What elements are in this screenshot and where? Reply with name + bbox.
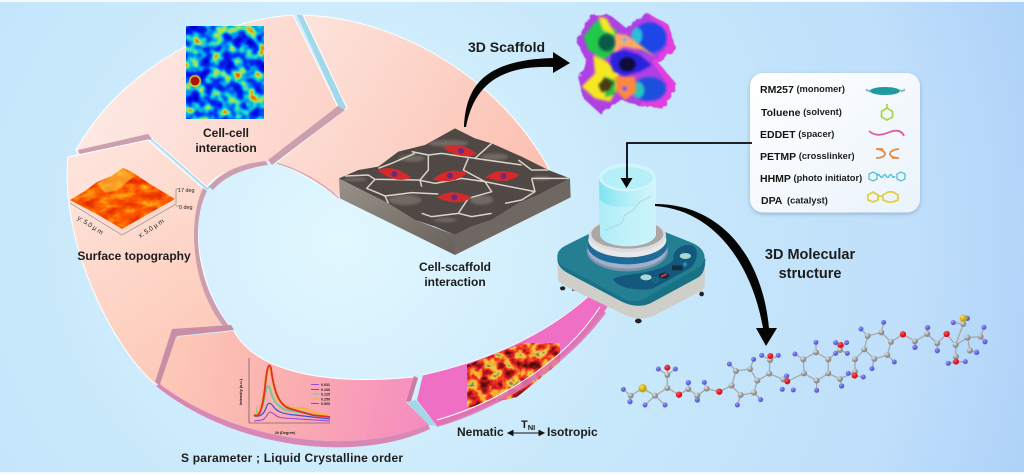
segment edge strips — [78, 106, 345, 190]
text: surface topography: Surface topography — [77, 249, 191, 263]
T NI: T — [521, 419, 528, 431]
arrow: legend to beaker — [620, 143, 752, 188]
isotropic: Isotropic — [547, 425, 598, 439]
arrow: to 3D scaffold — [464, 52, 570, 127]
icon: catalyst — [868, 192, 898, 202]
band thickness — [156, 384, 430, 447]
chevron strip — [155, 325, 234, 386]
curve 1 — [254, 412, 330, 421]
x axis label: 2θ (Degree) — [275, 431, 296, 435]
legend labels: PETMP — [760, 151, 796, 163]
upper-left hole — [598, 34, 615, 51]
illustration: magnetic stirrer with beaker — [557, 163, 705, 323]
text: cell-scaffold interaction — [419, 260, 491, 289]
orange ridges — [613, 33, 655, 100]
curve 2 — [254, 403, 330, 419]
pore shading — [343, 140, 551, 222]
illustration: 3D printed scaffold — [577, 13, 677, 113]
text: cell-scaffold interaction: Cell-scaffold — [419, 260, 491, 274]
text: nematic isotropic transition — [457, 419, 598, 439]
legend labels — [760, 84, 862, 207]
text: 3D molecular structure — [765, 247, 855, 282]
panel: cell-scaffold segment — [277, 15, 552, 200]
blue lobes — [631, 22, 667, 101]
inner edge strip — [194, 188, 230, 327]
knobs — [640, 253, 691, 280]
left side — [339, 178, 455, 255]
magenta rim — [637, 13, 677, 108]
text: S parameter: S parameter ; Liquid Crystalline order — [181, 451, 403, 465]
scale top: 17 deg — [178, 188, 194, 194]
inner white edge — [234, 331, 414, 379]
text: 3D molecular structure: 3D Molecular — [765, 247, 855, 263]
arrow: beaker to molecule — [655, 204, 777, 346]
top surface — [339, 128, 570, 235]
legend labels: DPA — [761, 195, 783, 207]
curve 4 — [254, 368, 330, 416]
outer shape — [577, 13, 677, 113]
plate rings — [587, 219, 668, 271]
legend labels: (spacer) — [798, 129, 834, 139]
segment gaps — [148, 15, 437, 426]
legend: 0.250 — [321, 398, 330, 402]
right side — [455, 178, 571, 255]
carbon atoms — [628, 321, 984, 399]
icon: crosslinker — [876, 149, 899, 158]
legend labels: RM257 — [760, 84, 794, 96]
base side — [557, 257, 705, 319]
double arrow — [508, 430, 544, 436]
panel: legend — [750, 73, 920, 212]
chart: surface topography — [70, 168, 194, 240]
T NI: NI — [528, 423, 535, 432]
legend labels: (monomer) — [796, 84, 845, 94]
scale bottom: 0 deg — [179, 205, 192, 211]
icon: toluene — [882, 104, 892, 120]
nematic: Nematic — [457, 425, 504, 439]
legend: 0.500 — [321, 402, 330, 406]
y axis label: Intensity (a.u.) — [239, 378, 243, 405]
legend — [311, 383, 330, 406]
veins — [345, 143, 570, 217]
white edge lines — [437, 307, 600, 420]
text: 3D molecular structure: structure — [779, 266, 841, 282]
axes — [249, 358, 330, 423]
legend labels: (catalyst) — [787, 196, 828, 206]
legend labels: EDDET — [760, 129, 796, 141]
legend: 0.125 — [321, 392, 330, 396]
chart: XRD intensity — [239, 358, 330, 435]
axes — [70, 189, 179, 235]
hot spot — [189, 75, 201, 87]
icon: photo initiator — [869, 172, 905, 181]
text: 3D scaffold: 3D Scaffold — [468, 39, 545, 55]
legend labels: HHMP — [760, 173, 791, 185]
hydrogen atoms — [621, 316, 988, 407]
notch strip — [406, 376, 418, 402]
axis label x: x: 5.0 µ m — [137, 218, 166, 240]
lower-left hole — [598, 78, 613, 92]
oxygen atoms — [664, 331, 959, 398]
sulfur atoms — [638, 315, 967, 392]
display — [653, 262, 687, 282]
illustration: cell scaffold block — [339, 128, 571, 255]
illustration: molecule — [621, 315, 988, 407]
panel: nematic segment — [417, 295, 615, 426]
base top — [557, 228, 705, 301]
axis label y: y: 5.0 µ m — [76, 215, 105, 237]
legend: 0.100 — [321, 388, 330, 392]
nematic band thickness — [437, 307, 606, 427]
peak highlight — [97, 168, 133, 193]
curve 5 — [254, 365, 330, 417]
panel: surface topography segment — [67, 140, 230, 384]
feet — [560, 286, 704, 323]
text: cell-cell interaction: Cell-cell — [203, 126, 249, 140]
liquid crystal texture — [467, 343, 560, 409]
text: cell-scaffold interaction: interaction — [424, 275, 486, 289]
green spike — [256, 405, 258, 414]
green lobes — [582, 17, 620, 102]
icon: monomer — [866, 87, 905, 95]
curve 3 — [254, 386, 330, 417]
cells — [376, 143, 520, 202]
legend labels: (crosslinker) — [799, 151, 855, 161]
base front — [557, 258, 705, 306]
legend: 0.031 — [321, 383, 330, 387]
icon: spacer wave — [869, 131, 904, 136]
surface — [70, 168, 175, 229]
control panel — [613, 245, 697, 290]
text: cell-cell interaction: interaction — [195, 141, 257, 155]
legend labels: (solvent) — [803, 107, 842, 117]
beaker — [599, 163, 656, 246]
center hole — [610, 50, 652, 76]
panel: circular ring of segments — [67, 15, 615, 447]
panel: cell-cell segment — [76, 15, 338, 187]
heat map: cell-cell — [186, 26, 264, 119]
bonds — [623, 318, 985, 405]
panel: S parameter segment — [160, 331, 428, 441]
legend labels: Toluene — [761, 107, 801, 119]
legend labels: (photo initiator) — [794, 173, 862, 183]
inner edge of cell-scaffold segment — [277, 163, 339, 198]
text: cell-cell interaction — [195, 126, 257, 155]
